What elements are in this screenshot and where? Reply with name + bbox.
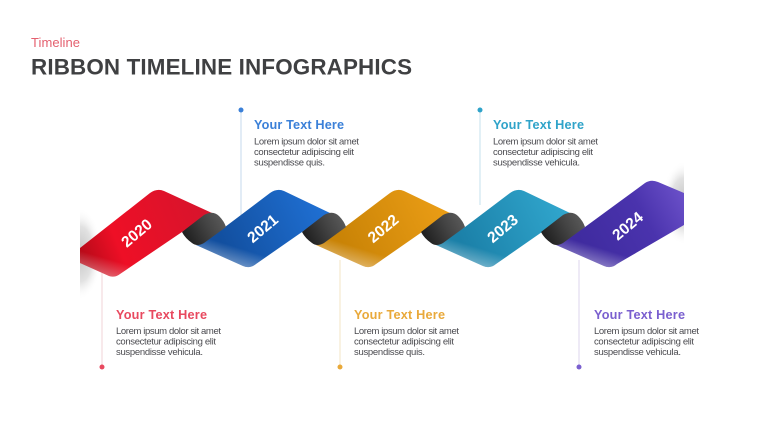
text block: 2021: Lorem ipsum dolor sit amet (254, 136, 359, 148)
fold: orange to teal (421, 213, 465, 245)
year labels: 2024 (609, 209, 647, 244)
text block: 2021: consectetur adipiscing elit (254, 147, 354, 158)
text block: 2023: Your Text Here (493, 118, 584, 132)
text block: 2020: Lorem ipsum dolor sit amet (116, 326, 221, 337)
text block: 2024: Lorem ipsum dolor sit amet (594, 326, 699, 337)
segment: 2023 teal (436, 190, 570, 267)
segment: 2024 purple (556, 181, 684, 267)
segment: 2021 blue (196, 190, 330, 267)
text block: 2024: suspendisse vehicula. (594, 347, 681, 358)
year labels: 2023 (484, 211, 522, 247)
text block: 2023: suspendisse vehicula. (493, 158, 580, 168)
text block: 2023: Lorem ipsum dolor sit amet (493, 136, 598, 148)
text block: 2024: consectetur adipiscing elit (594, 336, 694, 348)
fold: teal to purple (541, 213, 585, 245)
year labels: 2020 (118, 216, 156, 251)
text block: 2024: Your Text Here (594, 308, 685, 322)
subtitle: Timeline (31, 35, 80, 50)
year labels (118, 209, 647, 251)
fold: blue to orange (302, 213, 346, 245)
title: RIBBON TIMELINE INFOGRAPHICS (31, 54, 412, 80)
text block: 2021: Your Text Here (254, 118, 344, 132)
text block: 2022 (354, 308, 459, 358)
text block: 2022: suspendisse quis. (354, 347, 425, 358)
text block: 2020: Your Text Here (116, 308, 207, 322)
text block: 2020: consectetur adipiscing elit (116, 336, 216, 348)
ribbon (80, 181, 684, 277)
text block: 2022: consectetur adipiscing elit (354, 336, 454, 348)
year labels: 2021 (244, 211, 282, 247)
year labels: 2022 (365, 211, 402, 247)
text block: 2022: Your Text Here (354, 308, 445, 322)
text block: 2021 (254, 118, 359, 168)
text block: 2020 (116, 308, 221, 358)
text block: 2021: suspendisse quis. (254, 158, 325, 168)
text block: 2024 (594, 308, 699, 358)
connector lines and dots (100, 108, 582, 370)
text block: 2020: suspendisse vehicula. (116, 347, 203, 358)
text block: 2023 (493, 118, 598, 168)
text block: 2022: Lorem ipsum dolor sit amet (354, 326, 459, 337)
text block: 2023: consectetur adipiscing elit (493, 147, 593, 158)
fold: red to blue (182, 213, 226, 245)
segment: 2020 red (80, 190, 212, 277)
segment: 2022 orange (316, 190, 450, 267)
ribbon end shadows (80, 170, 684, 290)
